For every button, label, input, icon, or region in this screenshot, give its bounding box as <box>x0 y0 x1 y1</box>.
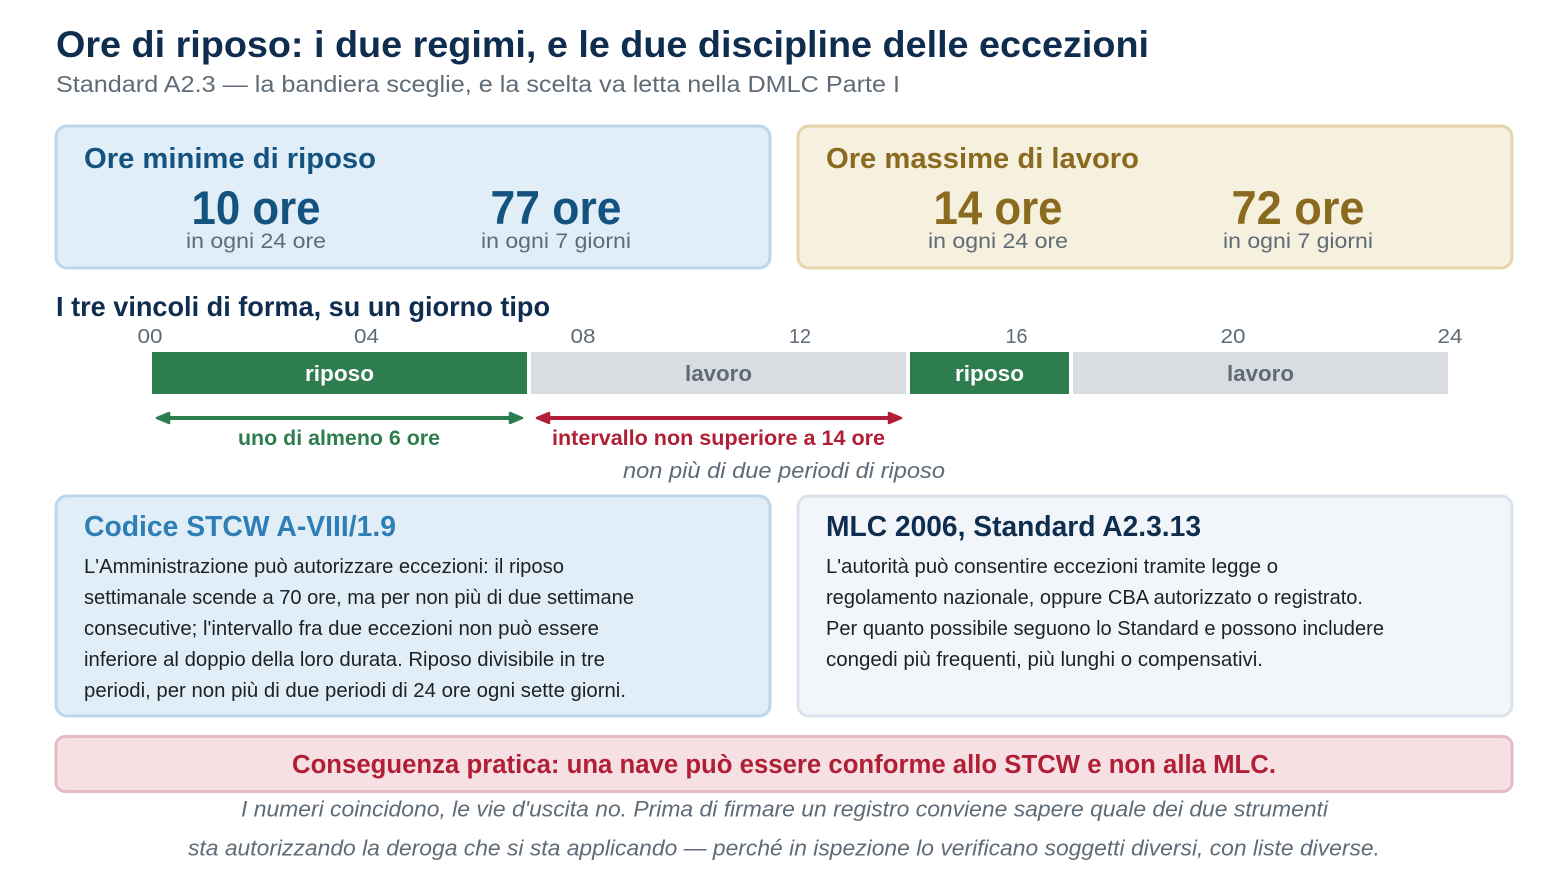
stat caption: 24 ore: in ogni 24 ore <box>186 229 326 253</box>
body text: STCW <box>84 555 634 702</box>
closing note <box>188 796 1380 860</box>
hour axis labels: 20 <box>1220 326 1246 348</box>
timeline note: non più di due periodi di riposo <box>623 458 945 483</box>
section heading: I tre vincoli di forma, su un giorno tipo <box>56 291 550 322</box>
heading: STCW: Codice STCW A-VIII/1.9 <box>84 511 396 543</box>
arrow label: intervallo 14 ore: intervallo non superiore a 14 ore <box>552 426 885 450</box>
segment: riposo 2 <box>910 352 1069 394</box>
closing note: I numeri coincidono, le vie d'uscita no. Prima di firmare un registro conviene sapere quale dei due strumenti <box>241 796 1329 822</box>
timeline chart <box>138 326 1462 483</box>
stat: 72 ore: 72 ore <box>1232 181 1364 234</box>
subtitle: Standard A2.3 — la bandiera sceglie, e la scelta va letta nella DMLC Parte I <box>56 71 900 97</box>
hour axis labels: 00 <box>138 326 162 348</box>
stat caption: 24 ore: in ogni 24 ore <box>928 229 1068 253</box>
stat: 10 ore: 10 ore <box>192 181 320 234</box>
body text: MLC: L'autorità può consentire eccezioni tramite legge o <box>826 555 1278 578</box>
heading: ore minime: Ore minime di riposo <box>84 143 376 175</box>
closing note: sta autorizzando la deroga che si sta applicando — perché in ispezione lo verificano soggetti diversi, con liste diverse. <box>188 836 1380 860</box>
segment: riposo 1: riposo <box>305 361 374 386</box>
body text: STCW: L'Amministrazione può autorizzare eccezioni: il riposo <box>84 555 564 578</box>
callout: conseguenza pratica: Conseguenza pratica: una nave può essere conforme allo STCW e non alla MLC. <box>292 751 1276 779</box>
stat: 77 ore: 77 ore <box>490 181 622 234</box>
arrow label: almeno 6 ore: uno di almeno 6 ore <box>238 426 440 450</box>
body text: MLC: Per quanto possibile seguono lo Standard e possono includere <box>826 617 1384 640</box>
callout: conseguenza pratica <box>56 736 1512 792</box>
segment: lavoro 1: lavoro <box>685 361 752 386</box>
panel: MLC 2006 <box>798 496 1512 716</box>
stat: 14 ore: 14 ore <box>934 181 1062 234</box>
hour axis labels: 08 <box>570 326 596 348</box>
segment: lavoro 2 <box>1073 352 1448 394</box>
panel: ore massime di lavoro <box>798 126 1512 268</box>
heading: MLC: MLC 2006, Standard A2.3.13 <box>826 511 1201 543</box>
body text: STCW: settimanale scende a 70 ore, ma per non più di due settimane <box>84 586 634 609</box>
stat caption: 7 giorni: in ogni 7 giorni <box>1223 229 1373 253</box>
body text: MLC <box>826 555 1384 671</box>
panel: codice STCW <box>56 496 770 716</box>
hour axis labels: 16 <box>1006 326 1028 348</box>
segment: lavoro 2: lavoro <box>1227 361 1294 386</box>
segment: riposo 2: riposo <box>955 361 1024 386</box>
heading: ore massime: Ore massime di lavoro <box>826 143 1139 175</box>
hour axis labels <box>138 326 1462 348</box>
title: Ore di riposo: i due regimi, e le due discipline delle eccezioni <box>56 24 1149 65</box>
hour axis labels: 04 <box>354 326 379 348</box>
body text: STCW: periodi, per non più di due periodi di 24 ore ogni sette giorni. <box>84 679 626 702</box>
hour axis labels: 24 <box>1438 326 1462 348</box>
body text: STCW: consecutive; l'intervallo fra due eccezioni non può essere <box>84 617 599 640</box>
stat caption: 7 giorni: in ogni 7 giorni <box>481 229 631 253</box>
segment: lavoro 1 <box>531 352 906 394</box>
body text: MLC: regolamento nazionale, oppure CBA autorizzato o registrato. <box>826 586 1363 609</box>
arrow: intervallo 14 ore <box>537 413 901 423</box>
body text: STCW: inferiore al doppio della loro durata. Riposo divisibile in tre <box>84 648 605 671</box>
arrow: almeno 6 ore <box>157 413 522 423</box>
panel: ore minime di riposo <box>56 126 770 268</box>
body text: MLC: congedi più frequenti, più lunghi o compensativi. <box>826 648 1263 671</box>
hour axis labels: 12 <box>789 326 811 348</box>
segment: riposo 1 <box>152 352 527 394</box>
